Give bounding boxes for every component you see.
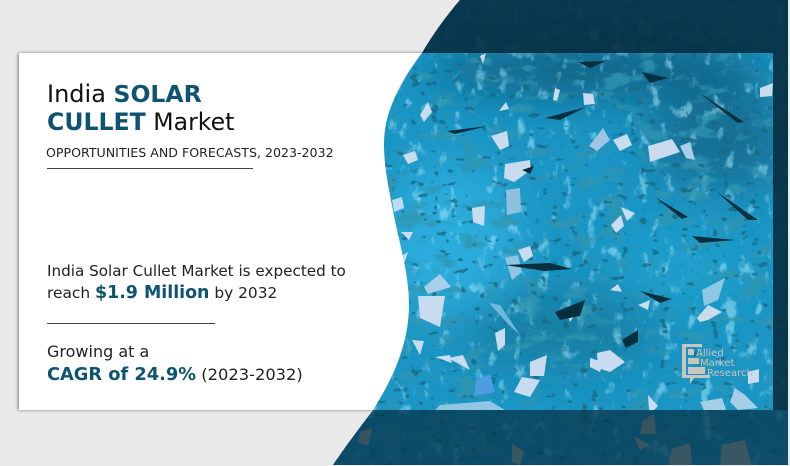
- title: India SOLAR: [47, 80, 202, 108]
- CAGR text: Growing at a: [47, 342, 149, 361]
- logo: Research: [707, 368, 753, 379]
- title: CULLET Market: [47, 108, 234, 136]
- subtitle: OPPORTUNITIES AND FORECASTS, 2023-2032: [46, 145, 334, 160]
- CAGR text: CAGR of 24.9% (2023-2032): [47, 364, 303, 385]
- logo: Allied: [696, 348, 724, 359]
- darker upper band: [400, 0, 790, 410]
- dark glass gaps: [447, 61, 758, 348]
- CAGR text: [47, 342, 303, 385]
- title: [47, 80, 234, 136]
- white text panel: [19, 53, 439, 410]
- logo: [682, 344, 753, 384]
- divider: [47, 168, 253, 169]
- divider: [47, 323, 215, 324]
- dark tinted surround: [330, 0, 790, 466]
- crushed glass image: [330, 0, 790, 466]
- pale glass shards: [358, 53, 773, 466]
- market size text: [47, 262, 346, 303]
- logo: Market: [700, 358, 734, 369]
- market size text: India Solar Cullet Market is expected to: [47, 262, 346, 280]
- market size text: reach $1.9 Million by 2032: [47, 283, 277, 303]
